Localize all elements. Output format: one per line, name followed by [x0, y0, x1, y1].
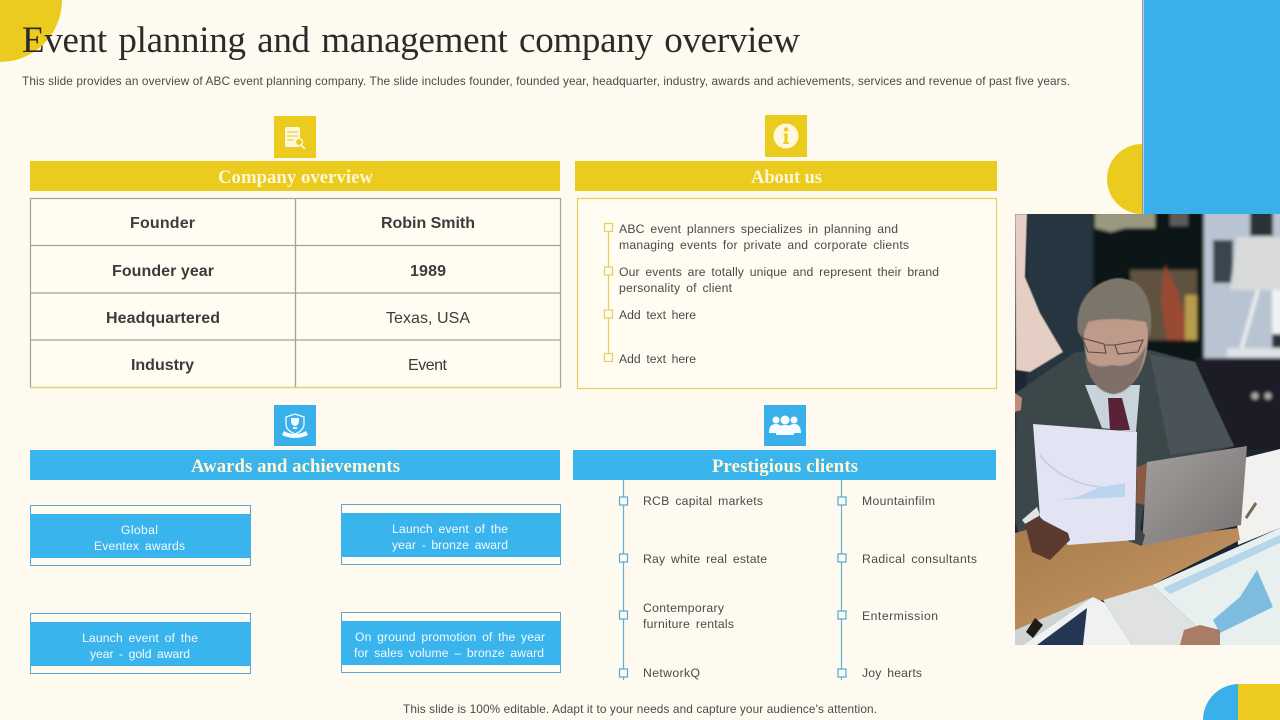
blurred office background: [1010, 210, 1280, 650]
row: headquartered: [106, 310, 470, 327]
man suit: [1015, 350, 1234, 560]
row: industry: Industry: [131, 357, 194, 374]
row: founder year: [112, 263, 446, 280]
heading: Awards and achievements: Awards and achievements: [191, 456, 400, 477]
glasses: [1082, 338, 1143, 354]
man face: [1083, 306, 1148, 394]
list: clients column 2: Entermission: [862, 609, 938, 623]
row: founder year: 1989: [410, 263, 446, 280]
text: about item 4: Add text here: [619, 352, 696, 366]
award: Global Eventex awards: Eventex awards: [94, 539, 185, 553]
woman sleeve: [1015, 214, 1063, 372]
heading: Company overview: Company overview: [218, 167, 374, 188]
fingers between paper and laptop: [1136, 463, 1147, 505]
award: Global Eventex awards: [30, 506, 251, 566]
heading: Prestigious clients: Prestigious clients: [712, 456, 858, 477]
icon: info: [765, 115, 807, 157]
list: clients column 2: Mountainfilm: [862, 494, 935, 508]
table: company facts: [30, 198, 561, 388]
row: founder: Robin Smith: [381, 215, 475, 232]
list: clients column 1: NetworkQ: [643, 666, 700, 680]
icon: document with magnifier: [274, 116, 316, 158]
row: industry: [131, 357, 448, 374]
foreground papers: [1152, 528, 1280, 645]
heading: Awards and achievements: [30, 450, 560, 480]
shirt cuff and hand: [1022, 507, 1040, 526]
document held: [1033, 424, 1137, 545]
icon: trophy badge: [274, 405, 316, 446]
list: clients column 1: [620, 480, 767, 680]
list: clients column 1: Contemporary: [643, 601, 725, 615]
footer note: This slide is 100% editable. Adapt it to your needs and capture your audience's attention.: [403, 702, 877, 716]
panel: about us list: [578, 198, 996, 388]
pen: [1246, 503, 1256, 518]
award: Launch event gold: year - gold award: [90, 647, 190, 661]
title: Event planning and management company overview: [22, 20, 800, 61]
row: headquartered: Texas, USA: [386, 310, 470, 327]
row: industry: Event: [408, 357, 448, 374]
row: founder year: Founder year: [112, 263, 214, 280]
award: Launch event bronze: [341, 504, 561, 564]
photo: businessman reviewing charts at a desk: [1010, 210, 1280, 650]
heading: Company overview: [30, 161, 560, 191]
text: about item 1: [619, 222, 909, 252]
heading: About us: [575, 161, 997, 191]
text: about item 2: Our events are totally unique and represent their brand: [619, 265, 939, 279]
award: Launch event gold: [30, 614, 251, 674]
row: founder: Founder: [130, 215, 195, 232]
list: clients column 2: [838, 480, 977, 680]
text: about item 3: Add text here: [619, 308, 696, 322]
heading: Prestigious clients: [573, 450, 996, 480]
decoration: bottom-right blue and yellow corner: [1203, 684, 1280, 720]
hand at left edge: [1015, 393, 1022, 412]
white table at right: [1235, 449, 1280, 545]
icon: group of people: [764, 405, 806, 446]
list: clients column 2: Joy hearts: [862, 666, 922, 680]
wood table: [1015, 525, 1240, 630]
text: about item 1: ABC event planners specializes in planning and: [619, 222, 898, 236]
text: about item 1: managing events for private and corporate clients: [619, 238, 909, 252]
award: On ground promotion: for sales volume – bronze award: [354, 646, 544, 660]
list: clients column 1: Ray white real estate: [643, 552, 767, 566]
list: clients column 1: RCB capital markets: [643, 494, 763, 508]
man hair: [1077, 278, 1151, 338]
row: headquartered: Headquartered: [106, 310, 220, 327]
subtitle: This slide provides an overview of ABC event planning company. The slide includes founder, founded year, headquarter, industry, awards and achievements, services and revenue of past five years.: [22, 74, 1070, 88]
laptop: [1142, 446, 1247, 546]
award: Global Eventex awards: Global: [121, 523, 158, 537]
decoration: top-right blue block with yellow half circle: [1107, 0, 1280, 216]
list: clients column 2: Radical consultants: [862, 552, 977, 566]
heading: About us: About us: [751, 167, 822, 188]
man shirt and tie: [1085, 385, 1140, 432]
list: clients column 1: furniture rentals: [643, 617, 734, 631]
award: Launch event bronze: year - bronze award: [392, 538, 508, 552]
award: Launch event gold: Launch event of the: [82, 631, 198, 645]
award: Launch event bronze: Launch event of the: [392, 522, 508, 536]
text: about item 2: [619, 265, 939, 295]
award: On ground promotion: On ground promotion of the year: [355, 630, 545, 644]
text: about item 2: personality of client: [619, 281, 733, 295]
award: On ground promotion: [341, 612, 561, 672]
row: founder: [130, 215, 475, 232]
decoration: top-left yellow quarter circle: [0, 0, 62, 62]
